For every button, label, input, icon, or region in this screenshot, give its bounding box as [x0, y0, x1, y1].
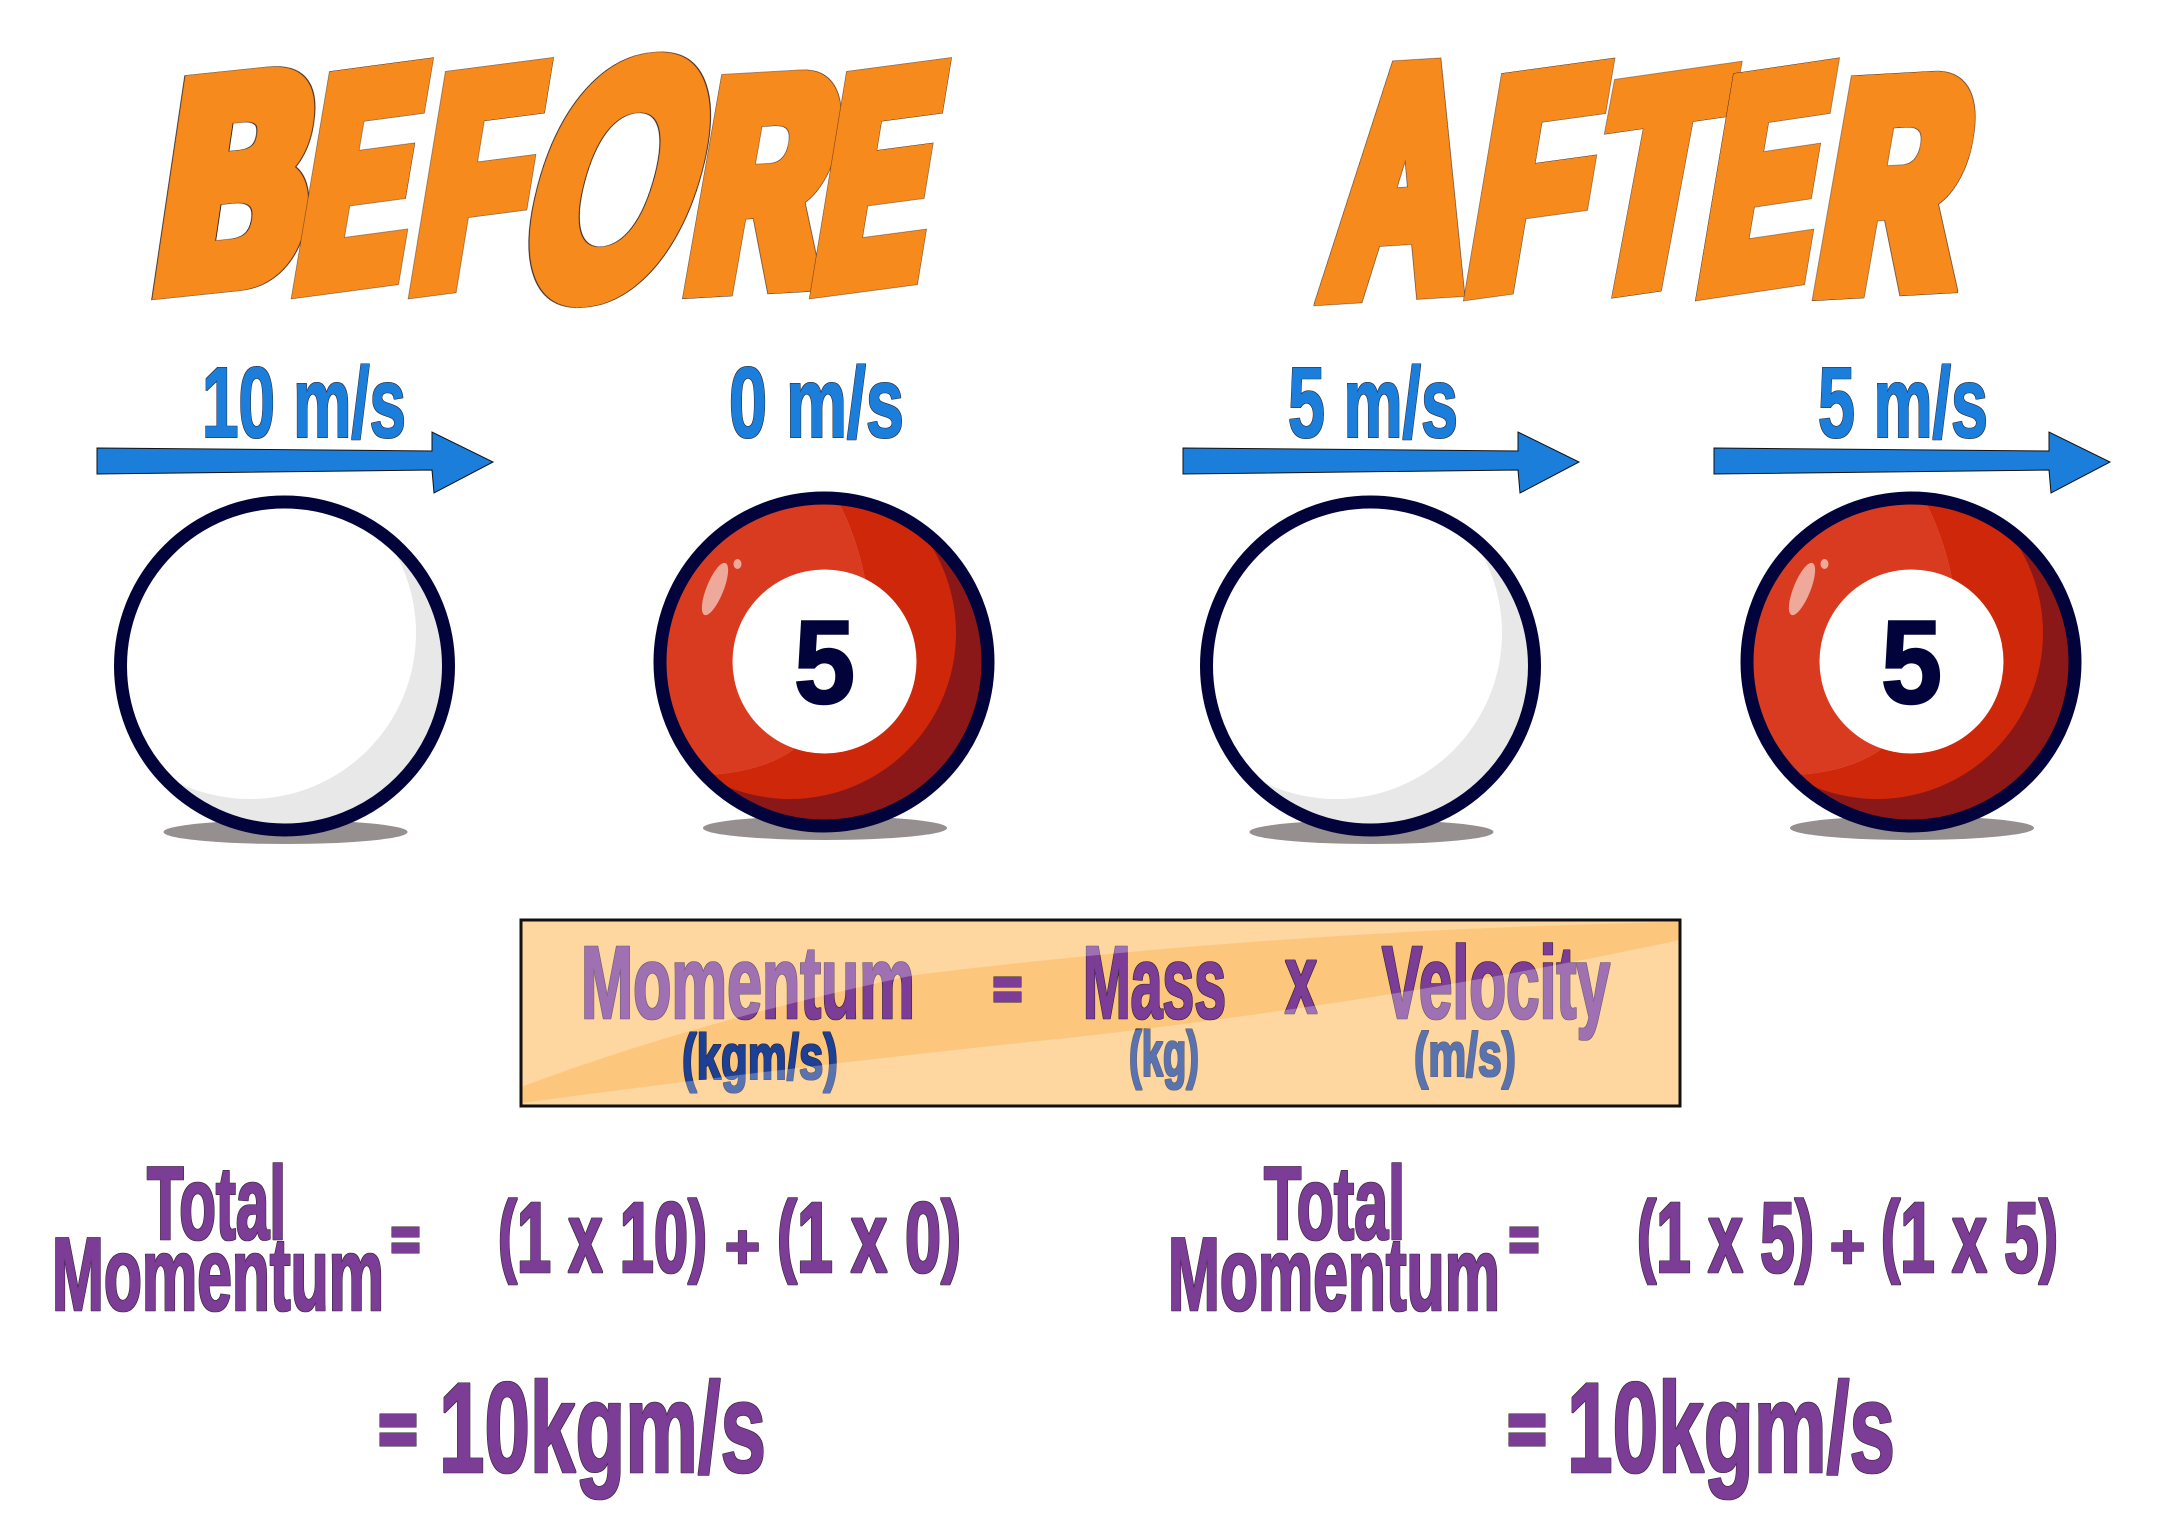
calculation: after: )	[1795, 1183, 1814, 1285]
calculation: after: +	[1830, 1213, 1865, 1282]
title: AFTER: R	[1804, 16, 1991, 353]
calculation: before: (	[498, 1183, 517, 1285]
formula text: Velocity: Velocity	[1382, 925, 1610, 1040]
red ball 5 after	[1740, 492, 2082, 840]
translucent sheen below band	[521, 940, 1680, 1106]
title: AFTER	[1316, 0, 1991, 361]
title: AFTER: E	[1687, 6, 1846, 354]
result: before	[380, 1357, 766, 1500]
calculation: after: Total	[1264, 1146, 1405, 1262]
formula panel: momentum = mass x velocity	[521, 919, 1680, 1106]
formula text: Mass: Mass	[1083, 925, 1226, 1040]
title: AFTER: T	[1573, 12, 1741, 355]
calculation: after	[1168, 1146, 2058, 1333]
calculation: after: )	[2039, 1183, 2058, 1285]
red ball 5 before: 5	[794, 597, 855, 729]
calculation: after: (	[1881, 1183, 1900, 1285]
title: BEFORE: O	[488, 0, 751, 371]
red ball 5 after: 5	[1881, 597, 1942, 729]
result: before: 10kgm/s	[439, 1357, 766, 1500]
calculation: before: )	[941, 1183, 961, 1285]
velocity label: 0 m/s: 0 m/s	[729, 347, 904, 459]
calculation: before: Momentum	[52, 1217, 384, 1333]
title: BEFORE: F	[401, 5, 556, 351]
velocity label: 10 m/s: 10 m/s	[202, 347, 406, 459]
white ball before	[114, 496, 455, 844]
calculation: before: 1 x 0	[797, 1182, 941, 1294]
arrow: white ball after	[1183, 432, 1579, 493]
arrow: white ball before	[97, 432, 493, 493]
velocity label: 5 m/s white ball: 5 m/s	[1288, 347, 1458, 459]
calculation: before: +	[725, 1213, 760, 1282]
title: AFTER: A	[1316, 0, 1490, 361]
formula text: times: x	[1285, 924, 1317, 1034]
result: after	[1509, 1357, 1895, 1500]
title: AFTER: F	[1455, 6, 1618, 353]
formula text: Momentum: Momentum	[581, 925, 915, 1040]
translucent sheen above band	[521, 919, 1680, 1087]
title: BEFORE: E	[802, 5, 958, 351]
unit: kg: (kg)	[1129, 1018, 1199, 1090]
calculation: before: (	[777, 1183, 797, 1285]
result: after: 10kgm/s	[1567, 1357, 1895, 1500]
unit: m/s: (m/s)	[1414, 1021, 1516, 1090]
calculation: before: Total	[147, 1146, 286, 1262]
formula text: equals	[994, 977, 1021, 1002]
arrow: red ball after	[1714, 432, 2110, 493]
title: BEFORE	[145, 0, 958, 371]
calculation: after: 1 x 5	[1656, 1182, 1795, 1294]
calculation: after: (	[1637, 1183, 1656, 1285]
calculation: after: Momentum	[1168, 1217, 1500, 1333]
title: BEFORE: B	[145, 9, 333, 352]
title: BEFORE: R	[674, 14, 858, 350]
title: BEFORE: E	[283, 4, 441, 351]
velocity label: 5 m/s red ball: 5 m/s	[1818, 347, 1988, 459]
calculation: before: )	[688, 1183, 707, 1285]
red ball 5 before	[654, 492, 994, 840]
calculation: before: 1 x 10	[517, 1182, 688, 1294]
calculation: before	[52, 1146, 961, 1333]
unit: kgm/s: (kgm/s)	[682, 1021, 838, 1093]
calculation: after: 1 x 5	[1900, 1182, 2039, 1294]
white ball after	[1200, 496, 1541, 844]
